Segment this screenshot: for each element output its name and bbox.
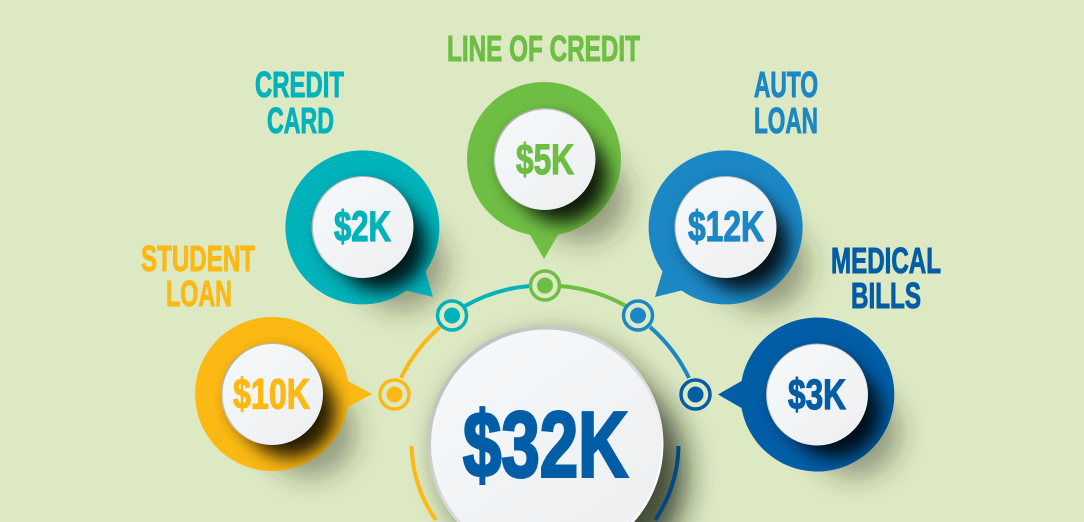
lower arc: yellow — [412, 446, 436, 520]
bubble: auto loan — [649, 150, 803, 304]
value: credit card: $2K — [334, 203, 391, 251]
value: line of credit: $5K — [516, 136, 574, 184]
node: medical bills — [681, 380, 710, 409]
label: auto loan: AUTO — [754, 64, 818, 105]
value: medical bills: $3K — [788, 371, 846, 419]
bubble: medical bills — [718, 318, 894, 472]
label: credit card: CARD — [267, 100, 334, 141]
label: credit card — [255, 64, 344, 141]
label: auto loan: LOAN — [754, 100, 818, 141]
label: student loan: LOAN — [166, 273, 232, 314]
label: medical bills: BILLS — [851, 275, 921, 316]
connector arc: segmented colors — [401, 286, 689, 378]
label: student loan — [141, 238, 255, 314]
node: student loan — [380, 380, 409, 409]
label: auto loan — [754, 64, 818, 141]
bubble: credit card — [285, 150, 439, 304]
label: medical bills — [831, 240, 941, 316]
label: student loan: STUDENT — [141, 238, 255, 279]
label: medical bills: MEDICAL — [831, 240, 941, 281]
center circle soft shadow — [553, 452, 575, 474]
center total circle — [428, 326, 663, 522]
value: auto loan: $12K — [688, 203, 764, 251]
bubble: line of credit — [467, 82, 621, 259]
node: line of credit — [530, 271, 560, 300]
label: line of credit: LINE OF CREDIT — [447, 28, 640, 69]
lower arc: blue — [655, 446, 678, 520]
node: auto loan — [624, 301, 652, 330]
value: student loan: $10K — [233, 370, 310, 418]
total amount: $32K — [463, 392, 628, 496]
label: credit card: CREDIT — [255, 64, 344, 105]
node: credit card — [438, 301, 466, 330]
bubble: student loan — [195, 317, 372, 471]
